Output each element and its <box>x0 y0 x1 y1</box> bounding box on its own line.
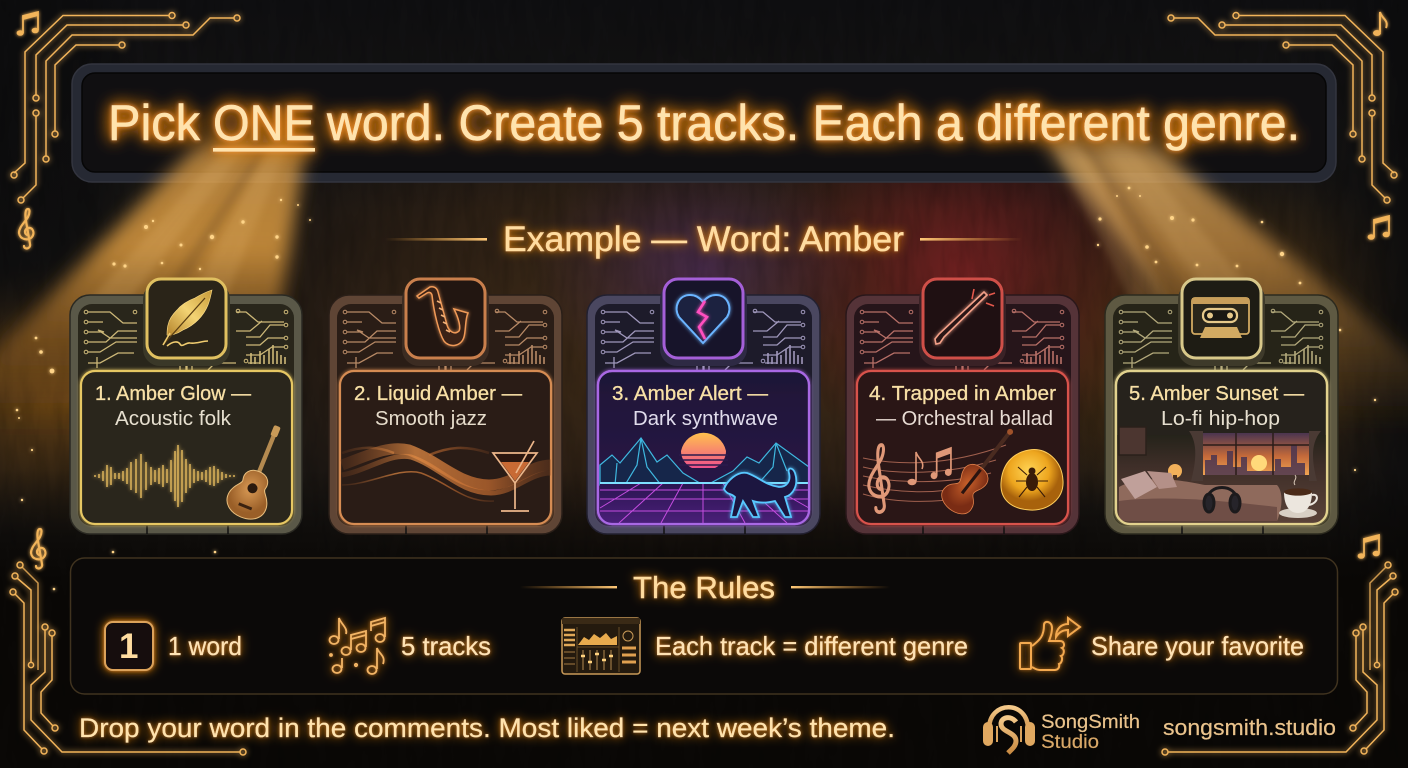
title panel <box>72 64 1336 182</box>
panel text box <box>81 371 292 524</box>
call to action: Drop your word in the comments. Most liked = next week’s theme. <box>79 713 895 743</box>
icon: note top left <box>17 12 39 36</box>
panel: the rules <box>70 558 1338 694</box>
card 2: Liquid Amber <box>329 279 562 534</box>
circuit corner: top right <box>1168 12 1397 203</box>
card 2: Liquid Amber: Smooth jazz <box>375 408 487 430</box>
icon: feather <box>143 279 230 366</box>
rule: 5 tracks <box>330 618 491 674</box>
title: Pick <box>108 94 201 151</box>
card 1: Amber Glow: Acoustic folk <box>115 408 232 430</box>
rule: 5 tracks: 5 tracks <box>401 631 491 661</box>
panel text box <box>857 371 1068 524</box>
icon: violin <box>936 419 1025 520</box>
card 5: Amber Sunset: Lo-fi hip-hop <box>1161 408 1280 430</box>
icon: clef left <box>19 209 33 248</box>
staff lines and notes <box>863 445 1006 512</box>
card 5: Amber Sunset: 5. Amber Sunset — <box>1129 383 1304 405</box>
card 1: Amber Glow <box>70 279 302 534</box>
circuit corner: top left <box>11 12 240 203</box>
card 2: Liquid Amber: 2. Liquid Amber — <box>354 383 522 405</box>
rules heading: The Rules <box>633 570 775 605</box>
title: word. Create 5 tracks. Each a different genre. <box>326 94 1300 151</box>
icon: note top right <box>1373 12 1387 36</box>
section heading: example: Example — Word: Amber <box>503 220 904 259</box>
card 3: Amber Alert: 3. Amber Alert — <box>612 383 768 405</box>
rule: 1 word: 1 <box>119 627 138 666</box>
rule: 1 word: 1 word <box>168 631 242 661</box>
website url: songsmith.studio <box>1163 715 1336 740</box>
icon: guitar <box>222 419 296 525</box>
rule: 1 word <box>105 622 242 670</box>
icon: martini <box>493 441 537 511</box>
circuit corner: bottom left <box>10 562 246 755</box>
card 4: Trapped in Amber: 4. Trapped in Amber <box>869 383 1056 405</box>
card 3: Amber Alert: Dark synthwave <box>633 408 778 430</box>
icon: broken neon heart <box>660 279 747 366</box>
panel text box <box>598 371 809 524</box>
spotlight beam left <box>0 130 308 430</box>
sparkles <box>16 187 1376 590</box>
icon: coffee cup <box>1279 475 1317 518</box>
logo: SongSmith Studio <box>983 707 1140 753</box>
synthwave grid <box>599 482 809 523</box>
icon: amber stone with insect <box>1001 450 1063 510</box>
lo-fi bedroom scene <box>1117 427 1326 523</box>
icon: saxophone <box>402 279 489 366</box>
rule: share your favorite: Share your favorite <box>1091 631 1304 661</box>
icon: cassette <box>1178 279 1265 366</box>
icon: note right <box>1368 216 1390 240</box>
panel text box <box>340 371 551 524</box>
icon: conductor baton <box>919 279 1006 366</box>
synthwave mountains <box>600 438 809 485</box>
icon: headphones <box>1204 488 1240 512</box>
title: ONE <box>213 94 315 151</box>
card 1: Amber Glow: 1. Amber Glow — <box>95 383 251 405</box>
icon: note bottom right <box>1358 535 1380 559</box>
spotlight beam right <box>1030 125 1408 430</box>
liquid waves <box>342 448 551 501</box>
card 4: Trapped in Amber: — Orchestral ballad <box>876 408 1053 430</box>
waveform <box>95 445 234 507</box>
panther <box>724 468 796 517</box>
icon: mixer console <box>562 618 640 674</box>
logo: SongSmith Studio: SongSmith <box>1041 712 1140 733</box>
rule: share your favorite <box>1020 618 1304 670</box>
panel text box <box>1116 371 1327 524</box>
rule: different genre: Each track = different genre <box>655 631 968 661</box>
card 3: Amber Alert <box>587 279 820 534</box>
card 5: Amber Sunset <box>1105 279 1338 534</box>
synthwave sun <box>679 433 728 468</box>
card 4: Trapped in Amber <box>846 279 1079 534</box>
circuit corner: bottom right <box>1162 562 1398 755</box>
logo: SongSmith Studio: Studio <box>1041 732 1099 753</box>
icon: clef bottom left <box>31 529 45 568</box>
